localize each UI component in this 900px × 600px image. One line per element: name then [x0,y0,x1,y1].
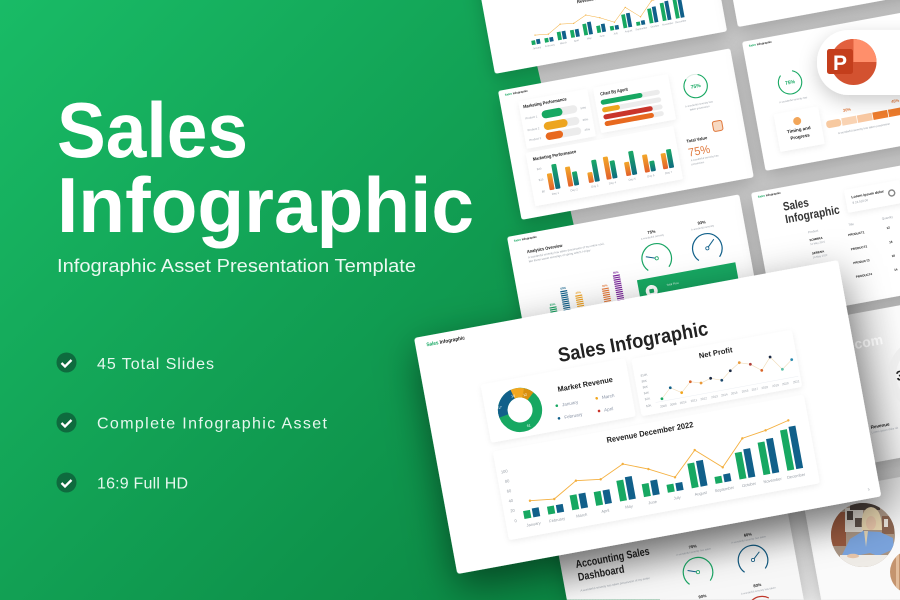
legend: February [564,412,584,420]
bar chart: marketing performance: $0 [542,189,546,194]
chart: revenue december 2022: November [763,476,783,484]
progress segments [824,94,900,137]
logo: Sales Infographic [757,191,782,199]
card: marketing performance bars: 45% [584,127,591,132]
card: marketing performance bars [518,89,596,149]
bar value labels: 15% [589,305,596,310]
chart: revenue december 2022: October [741,481,757,488]
donut chart: 14 [511,394,515,398]
timing and progress label [774,106,825,152]
description: like these sweet mornings of spring which I enjoy [528,248,591,263]
bar chart: marketing performance: Day 2 [570,187,578,193]
mini revenue chart: March [560,41,568,45]
data table: Title [848,222,855,227]
card: net profit: 2009 [670,402,677,407]
green left panel [0,0,660,600]
heading: Sales [782,195,810,214]
ring: 75 percent: A wonderful serenity has [685,99,714,108]
mini revenue chart: September [635,26,648,32]
revenue label [870,420,898,434]
mini revenue chart: April [574,39,579,43]
card: marketing performance bars: 50% [580,105,587,110]
card: net profit: 2014 [721,392,728,397]
card: net profit: $4K [643,390,649,395]
slide: analytics overview [507,194,763,366]
heading: Dashboard [577,564,625,584]
data table: Quantity [881,215,894,221]
photo: woman at desk [831,503,895,569]
gauge label: 90 percent: 90% [698,593,707,599]
chart: revenue december 2022: June [648,499,658,505]
card: net profit: 2015 [731,390,738,396]
data table: Product [808,228,819,234]
card: marketing performance bars: Product 3 [529,136,542,142]
title: Sales [57,86,248,174]
total value: A wonderful serenity has [690,153,720,162]
powerpoint badge [817,30,900,95]
data table: SOMBRA [809,236,824,242]
ring: 75 percent: taken possession [689,104,710,112]
green stat card [637,262,743,320]
green stat card: Total Flow [666,281,680,287]
card: net profit: $0K [646,403,652,408]
gauge: 93 percent: A wonderful serenity [691,223,715,232]
bar value labels: 60% [560,286,567,291]
total value: possession [691,160,705,166]
progress segments: A wonderful serenity has taken possession [838,122,891,135]
card: net profit: 2020 [782,381,789,386]
progress segments: 45% [891,98,900,104]
chart: revenue december 2022: 80 [504,478,511,484]
bar chart: marketing performance: Day 3 [591,183,599,189]
bar chart: marketing performance: $15 [538,177,544,182]
logo: Sales Infographic [748,40,773,48]
feature: full hd: 16:9 Full HD [97,476,188,492]
main slide: sales infographic [414,260,881,574]
card: net profit: 2019 [772,383,779,388]
chart: revenue december 2022: 0 [514,518,518,523]
card: net profit: 2013 [711,394,718,399]
card: lorem ipsum: Lorem ipsum dolor [851,189,885,199]
chart: revenue december 2022: January [526,520,541,528]
data table: 16 [889,240,893,244]
feature: complete infographic asset: Complete Infographic Asset [97,416,328,432]
photo: second person [890,554,900,590]
revenue label: Revenue [870,421,890,430]
feature: full hd [56,472,188,492]
mini revenue chart: August [625,29,633,34]
heading [782,190,841,226]
data table: 12 [886,225,891,230]
mini revenue chart: February [545,43,556,48]
heading [575,546,653,584]
bar chart: marketing performance [526,126,683,206]
gauge: 60 percent: A wonderful serenity has taken [731,534,767,545]
card: marketing performance bars: 65% [582,117,589,122]
title: Infographic [57,161,474,249]
chart: revenue december 2022: February [549,516,565,524]
icon: powerpoint: P [833,52,847,75]
card: net profit: 2011 [690,398,698,403]
slide: marketing performance [498,48,754,220]
card: net profit [631,330,802,416]
chart: revenue december 2022: 100 [500,468,509,474]
total value: 75% [687,144,711,160]
heading: Accounting Sales [575,546,651,571]
data table: PRODUCT2 [850,244,868,251]
bar chart: marketing performance: Day 5 [628,177,637,182]
legend: January [562,399,579,407]
gauge: 75 percent: A wonderful serenity [640,233,665,241]
card: market revenue [481,358,636,443]
slide: people photos [802,459,900,600]
icon: value badge [712,120,723,132]
chart: revenue december 2022 [493,395,820,540]
ring: 75 percent: 75% [785,79,796,87]
mini revenue chart: January [532,46,542,50]
slide: revenue ring [768,293,900,477]
chart: revenue december 2022: 20 [510,508,516,513]
gauge: 70 percent: 70% [688,543,698,550]
card: net profit: $10K [640,372,648,378]
gauge: 80 percent: 80% [753,582,762,588]
description: A wonderful serenity has taken possession of my entire soul, [528,242,605,260]
bar value labels: 45% [575,290,582,295]
heading: Infographic [784,202,841,226]
data table: SERENA [812,249,825,255]
ring value [887,336,900,413]
chart: revenue december 2022: March [576,512,588,519]
data table: 14 [894,267,898,272]
card: net profit: 2010 [679,400,687,405]
title [57,86,474,249]
chart: revenue december 2022: 60 [506,488,512,494]
data table: PRODUCT3 [853,258,870,265]
bar chart: marketing performance: Day 4 [609,180,617,185]
data table: 18 [891,254,896,258]
gauge: 80 percent [740,579,778,600]
gauge: 93 percent [688,217,724,261]
card: net profit: $2K [645,396,650,401]
data table: PRODUCT4 [856,272,873,279]
feature: 45 total slides [56,352,214,373]
gauge: 93 percent: 93% [697,219,706,226]
bar chart: marketing performance: Day 7 [665,170,673,175]
card: market revenue: Market Revenue [557,375,614,394]
faded heading: com [853,331,884,352]
data table [808,215,900,286]
card: net profit: 2008 [660,403,667,409]
mini revenue chart: October [650,24,660,29]
donut chart: 61 [527,423,531,428]
slide: sales infographic table [751,139,900,319]
card: net profit: 2018 [761,385,769,390]
page number: 5 [867,487,870,492]
chart: revenue december 2022: December [787,472,806,480]
data table: 14 May 2022 [812,253,828,259]
gauge: 75 percent: 75% [647,229,656,235]
card: net profit: Net Profit [698,345,734,360]
mini revenue chart: July [613,32,619,36]
bar value labels: 25% [549,302,556,307]
subtitle: Infographic Asset Presentation Template [57,256,416,276]
chart: revenue december 2022: Revenue December 2022 [606,420,695,445]
chart: revenue december 2022: August [694,490,708,497]
bar chart: marketing performance: Day 6 [647,173,655,178]
bar chart: marketing performance: Day 1 [551,191,560,196]
donut chart [494,384,546,436]
bar value labels: 50% [602,283,608,288]
card: net profit: 2016 [741,388,749,394]
timing and progress label: Timing and [787,125,811,134]
ring: 75 percent [773,65,808,104]
mini revenue chart: December [675,19,687,24]
card: marketing performance bars: Marketing Performance [523,96,567,109]
total value: Total Value [686,135,708,144]
bar chart: marketing performance: $30 [536,166,542,171]
card: net profit: 2021 [793,379,800,384]
logo: Sales Infographic [426,335,466,348]
card: net profit: 2017 [751,387,759,392]
feature list [56,352,328,492]
legend: March [601,393,615,400]
card: marketing performance bars: Product 2 [527,126,540,132]
slide: top right blank [720,0,900,27]
heading: Sales Infographic [556,318,710,367]
heading: Analytics Overview [527,243,563,254]
card: lorem ipsum: $ 24,510.00 [852,198,869,205]
card: chart by agent [593,74,676,133]
chart: revenue december 2022: July [673,495,681,501]
striped bar chart [549,275,626,339]
logo: Sales Infographic [513,235,538,243]
chart: revenue december 2022: April [601,508,610,514]
donut chart: 17 [498,405,502,410]
card: chart by agent: Chart By Agent [600,87,629,97]
chart: revenue december 2022: September [714,485,735,493]
legend: April [604,406,614,413]
feature: 45 total slides: 45 Total Slides [97,356,214,373]
gauge: 75 percent [637,227,673,271]
ring: 75 percent: 75% [690,83,702,91]
progress segments: 30% [843,106,852,113]
gauge: 60 percent [730,529,772,574]
gauge: 70 percent [675,541,717,586]
card: lorem ipsum [844,180,900,213]
chart: revenue december 2022: 40 [508,498,514,504]
data table: PRODUCT1 [848,230,865,237]
slide: timing and progress [742,0,900,171]
gauge: 80 percent: A wonderful serenity has taken [741,585,777,596]
card: net profit: $8K [641,379,647,384]
ring: 75 percent: A wonderful serenity has [779,95,808,104]
mini revenue chart [525,0,687,50]
logo: Sales Infographic [504,89,529,97]
mini revenue chart: November [662,22,674,27]
card: net profit: 2012 [700,396,708,401]
bar value labels [546,270,625,317]
legend [555,393,618,421]
gauge: 60 percent: 60% [743,531,753,538]
donut chart: 12 [523,393,527,397]
total value [686,133,720,166]
mini revenue chart: June [599,34,606,38]
ring: 75 percent [678,69,715,113]
card: marketing performance bars: Product 1 [525,114,538,120]
chart: revenue december 2022: May [625,503,633,510]
gauge: 70 percent: A wonderful serenity has taken [676,546,712,557]
data table: 12 May 2022 [810,239,826,246]
bar value labels: 85% [613,270,619,275]
description: A wonderful serenity has taken possession of my entire [580,576,651,593]
slide: top revenue chart [472,0,727,74]
card: net profit: $6K [642,385,648,389]
bar chart: marketing performance: Marketing Performance [532,149,577,162]
slide: accounting sales dashboard [548,456,804,600]
revenue label: Lorem ipsum dolor sit [871,426,898,434]
timing and progress label: Progress [790,132,811,141]
mini revenue chart: May [587,37,593,40]
